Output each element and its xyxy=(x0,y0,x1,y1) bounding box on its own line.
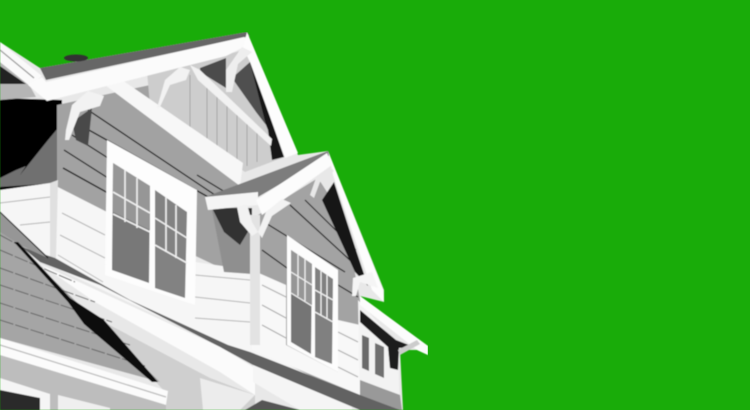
dormer roof shingles xyxy=(205,151,330,197)
long eave shingle strip xyxy=(22,247,400,410)
dormer right fascia xyxy=(328,151,384,302)
dormer white fascia xyxy=(256,153,332,215)
window two xyxy=(287,235,338,372)
house artwork xyxy=(0,32,428,410)
main white fascia xyxy=(28,37,250,101)
lower left wall and windows xyxy=(0,355,166,410)
second corbel bracket xyxy=(157,67,190,108)
white siding lower section xyxy=(0,180,360,410)
long white fascia xyxy=(40,264,255,395)
side wing xyxy=(358,296,428,410)
dormer white siding xyxy=(250,215,360,395)
lower left shingled roof xyxy=(0,212,160,382)
lower left gutter xyxy=(0,338,168,405)
eave gutter right xyxy=(253,365,352,410)
dormer underside shadow xyxy=(322,182,368,286)
main gable shingled wall xyxy=(57,85,245,270)
right gable fascia xyxy=(243,32,298,158)
dormer gable bracket xyxy=(352,272,378,296)
main roof shingles xyxy=(40,32,250,80)
dark recess under dormer xyxy=(212,208,252,274)
window one xyxy=(105,140,197,305)
lower wall under fascia xyxy=(100,320,300,410)
left corbel bracket xyxy=(65,91,104,140)
dormer left fascia xyxy=(205,192,258,210)
upper gable vertical board panel xyxy=(147,50,290,172)
gable bracket center xyxy=(226,47,252,92)
trim across upper gable xyxy=(190,65,272,146)
left gable section xyxy=(0,42,62,190)
house silhouette base xyxy=(0,32,428,410)
white diagonal trim under upper gable xyxy=(105,80,243,186)
dormer siding wall xyxy=(258,178,360,400)
roof vent xyxy=(64,54,88,62)
dormer corbel brackets xyxy=(237,167,334,238)
